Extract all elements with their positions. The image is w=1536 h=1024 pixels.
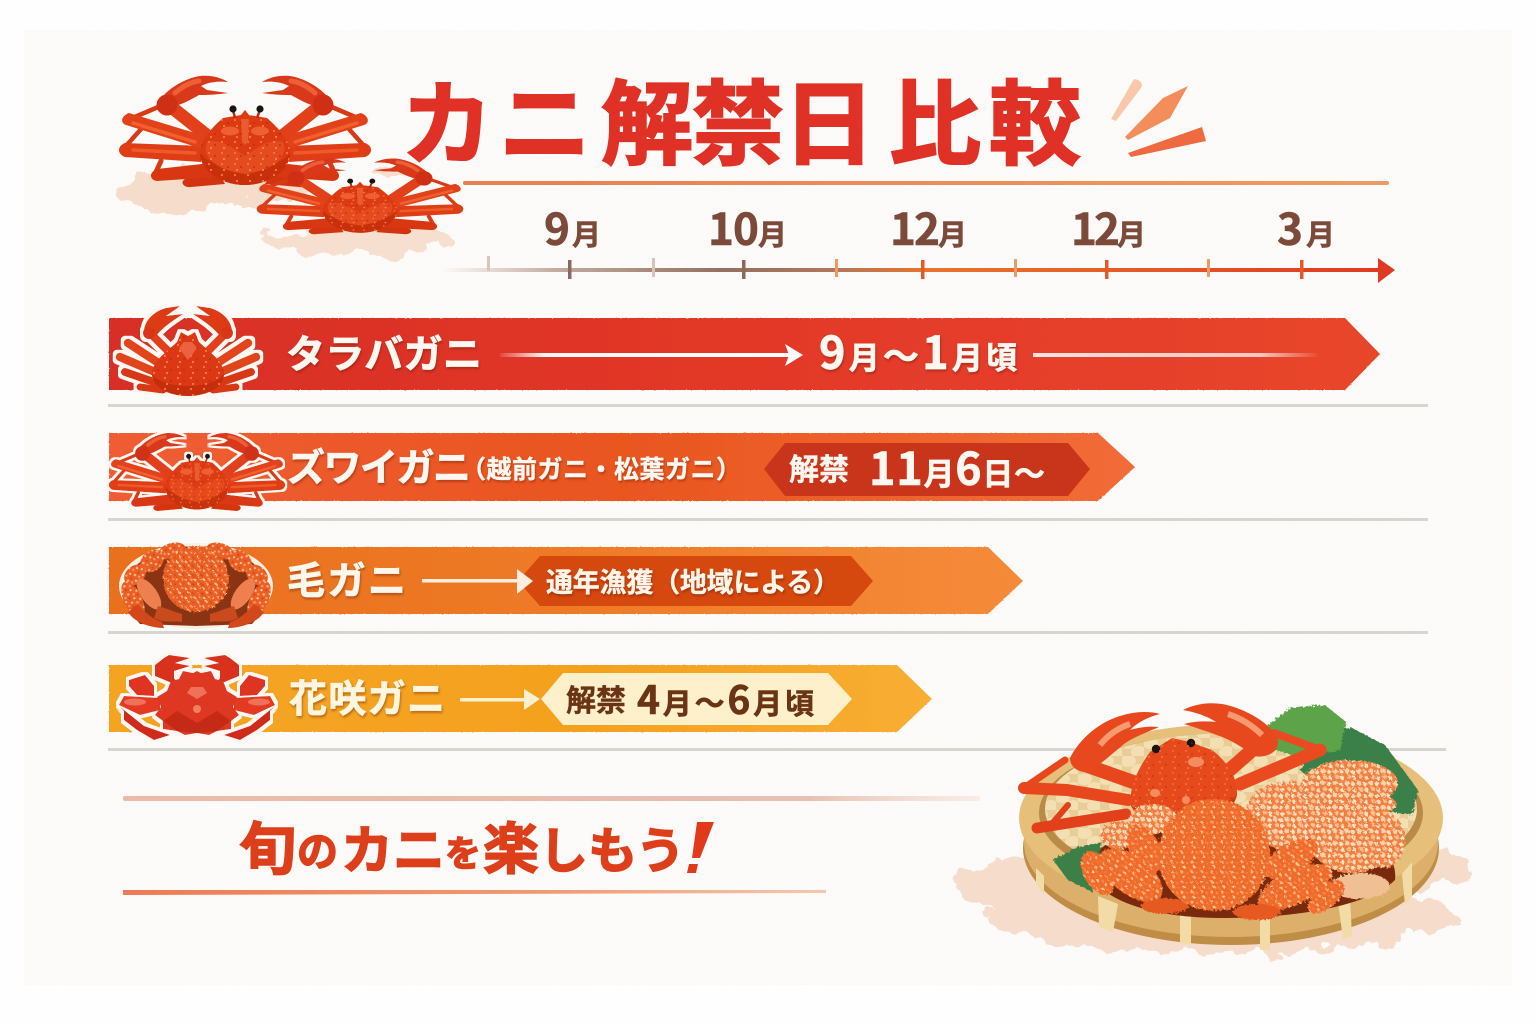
basket inner [1039,733,1423,893]
month label 4: 12月 [1071,194,1146,258]
badge: 通年漁獲（地域による） [518,556,873,606]
header crabs with watercolor shadows [112,76,463,255]
icon: タラバガニ [120,306,256,396]
row: ズワイガニ [109,433,1135,511]
timeline arrow with ticks [440,256,1395,283]
greens front [1053,842,1102,892]
basket weave [1045,733,1417,885]
closing message: を [445,825,481,877]
watercolor shadow: large crab [112,170,317,210]
month label 1: 9月 [544,194,601,258]
arrow tail line [1033,353,1317,357]
closing message lines [123,796,980,895]
month label 3: 12月 [890,194,967,258]
label: 毛ガニ: 毛ガニ [287,550,406,605]
icon: 花咲ガニ [119,655,275,740]
crab: hairy legs [1074,804,1350,920]
illustration: crab basket [955,703,1472,954]
icon: small crab [257,159,463,234]
label: ズワイガニ: ズワイガニ [287,437,471,492]
basket lower wall [1024,749,1438,937]
watercolor shadow [955,848,1472,954]
row: タラバガニ [109,306,1380,396]
bar: 花咲ガニ period [109,665,932,732]
closing message [239,804,714,886]
icon: large crab [119,76,371,187]
row: 花咲ガニ [109,655,932,740]
bar: 毛ガニ period [109,547,1023,614]
month label 2: 10月 [708,194,787,258]
closing message: カニ [341,809,445,884]
badge: 解禁 4月〜6月頃: 解禁 [566,676,626,720]
title underline [463,181,1389,185]
icon: title burst accent [1111,79,1206,157]
label: タラバガニ: タラバガニ [286,324,482,380]
row: 毛ガニ [109,540,1023,629]
basket rim [1019,724,1443,912]
basket body [1023,751,1439,945]
title: 解禁日 [601,51,875,184]
divider lines [108,404,1446,751]
bar: ズワイガニ period [109,433,1135,501]
basket bands [1036,862,1412,950]
closing message: 旬 [239,804,296,886]
greens back [1268,705,1418,815]
badge: 解禁 11月6日〜 [764,433,1090,498]
crab: red spider on basket [1024,703,1320,830]
badge: 解禁 11月6日〜: 11月6日〜 [869,433,1045,498]
crabs: hairy cluster right [1247,760,1405,899]
icon: ズワイガニ [109,433,285,511]
closing message: 楽 [483,805,539,886]
closing message: しもう [539,812,685,883]
badge: 解禁 4月〜6月頃: 4月〜6月頃 [637,670,814,726]
badge: 通年漁獲（地域による）: 通年漁獲（地域による） [546,561,840,600]
period: 9月〜1月頃: 9月〜1月頃 [819,317,1017,382]
crab shadow under pile [1085,818,1395,918]
arrow: start to period [500,344,803,366]
month label 5: 3月 [1277,194,1335,258]
label: 花咲ガニ: 花咲ガニ [289,668,445,723]
arrow: to badge [422,569,533,594]
title: カニ [401,51,591,184]
crab: hairy body [1158,799,1270,911]
watercolor shadow: small crab [263,164,453,255]
label: regional names: （越前ガニ・松葉ガニ） [461,450,741,486]
badge: 解禁 4月〜6月頃 [541,670,852,726]
title [401,51,1081,184]
timeline months [544,194,1335,258]
arrow: to badge [460,689,540,710]
badge: 解禁 11月6日〜: 解禁 [789,445,849,489]
bar: タラバガニ period [109,318,1380,390]
closing message: の [297,818,338,878]
icon: 毛ガニ [116,540,276,629]
title: 比較 [889,51,1081,184]
